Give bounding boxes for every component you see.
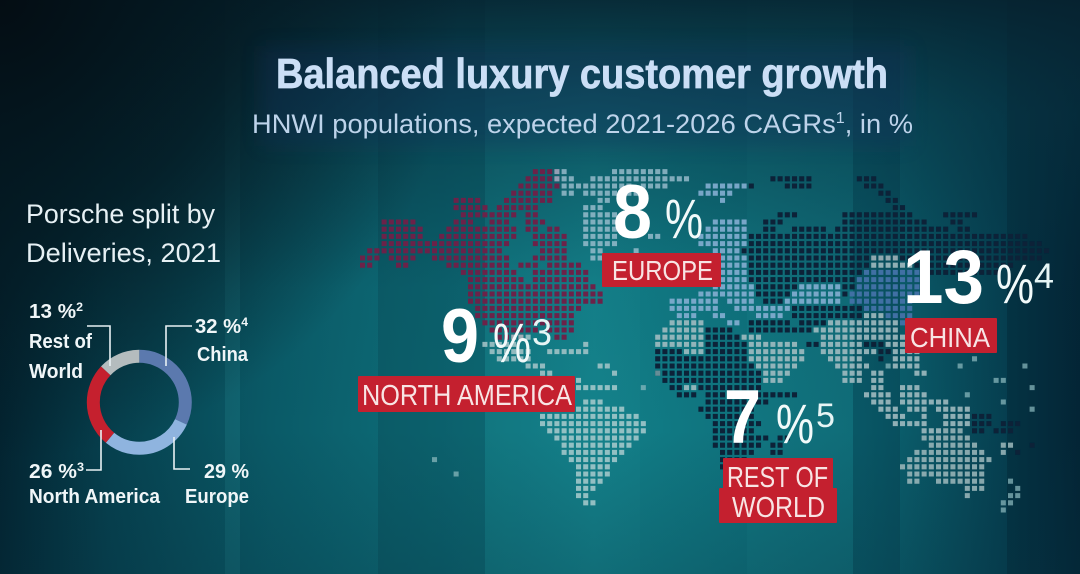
South America dots <box>533 380 648 503</box>
callout: Rest of World: REST OF <box>727 462 828 494</box>
label: rest of world share <box>29 300 92 383</box>
heading: Porsche split: Deliveries, 2021 <box>26 238 221 268</box>
Indonesia east dots <box>972 416 1037 452</box>
Central America dots <box>482 337 619 373</box>
label: North America share: North America <box>29 486 161 508</box>
callout: North America: 9 <box>441 294 479 379</box>
label: Europe share: 29 % <box>204 461 249 483</box>
subtitle: , in % <box>845 109 913 139</box>
callout: North America: 3 <box>532 312 552 353</box>
label: rest of world share: World <box>29 361 83 383</box>
world map of dots <box>360 172 1051 510</box>
callout: Rest of World: 5 <box>816 397 835 435</box>
heading: Porsche split <box>26 199 221 268</box>
Asia light dots <box>749 258 972 431</box>
callout: Rest of World: 7 <box>724 375 761 460</box>
label: North America share <box>29 460 161 508</box>
Australia dots <box>900 431 1015 496</box>
label: China share: 32 % <box>195 316 241 338</box>
China dots <box>850 272 922 323</box>
label: North America share: 26 % <box>29 461 75 483</box>
North America dots <box>360 172 605 337</box>
label: Europe share <box>185 461 249 508</box>
Africa dots <box>655 323 763 388</box>
label: China share: 4 <box>241 315 248 329</box>
callout: China <box>903 235 1054 353</box>
callout: Europe: 8 <box>613 170 652 255</box>
Russia and dark Asia dots <box>706 179 1051 359</box>
callout: Europe <box>602 170 721 287</box>
label: China share <box>195 315 249 366</box>
subtitle: HNWI populations, expected 2021-2026 CAGRs <box>252 109 830 139</box>
label: rest of world share: 13 % <box>29 301 75 323</box>
heading: Porsche split: Porsche split by <box>26 199 215 229</box>
title: Balanced luxury customer growth <box>276 50 888 97</box>
callout: Europe: % <box>665 187 703 250</box>
callout: North America: NORTH AMERICA <box>362 380 573 412</box>
label: North America share: 3 <box>77 460 84 474</box>
label: rest of world share: Rest of <box>29 331 92 353</box>
callout: China: 13 <box>903 235 984 320</box>
subtitle: 1 <box>836 110 845 127</box>
callout: Europe: EUROPE <box>612 255 713 286</box>
callout: North America <box>358 294 575 412</box>
callout: China: CHINA <box>910 322 990 353</box>
Pacific islands dots <box>432 359 1037 510</box>
callout: China: % <box>996 252 1034 315</box>
leader lines <box>86 326 192 470</box>
callout: North America: % <box>493 311 531 374</box>
callout: China: 4 <box>1034 257 1054 296</box>
callout: Rest of World: % <box>776 392 814 455</box>
label: Europe share: Europe <box>185 486 249 508</box>
Europe dots <box>670 186 842 323</box>
label: rest of world share: 2 <box>76 300 83 314</box>
callout: Rest of World <box>719 375 837 524</box>
callout: Rest of World: WORLD <box>732 492 825 524</box>
donut chart <box>93 356 185 448</box>
Greenland north dots <box>554 172 691 258</box>
label: China share: China <box>197 344 249 366</box>
